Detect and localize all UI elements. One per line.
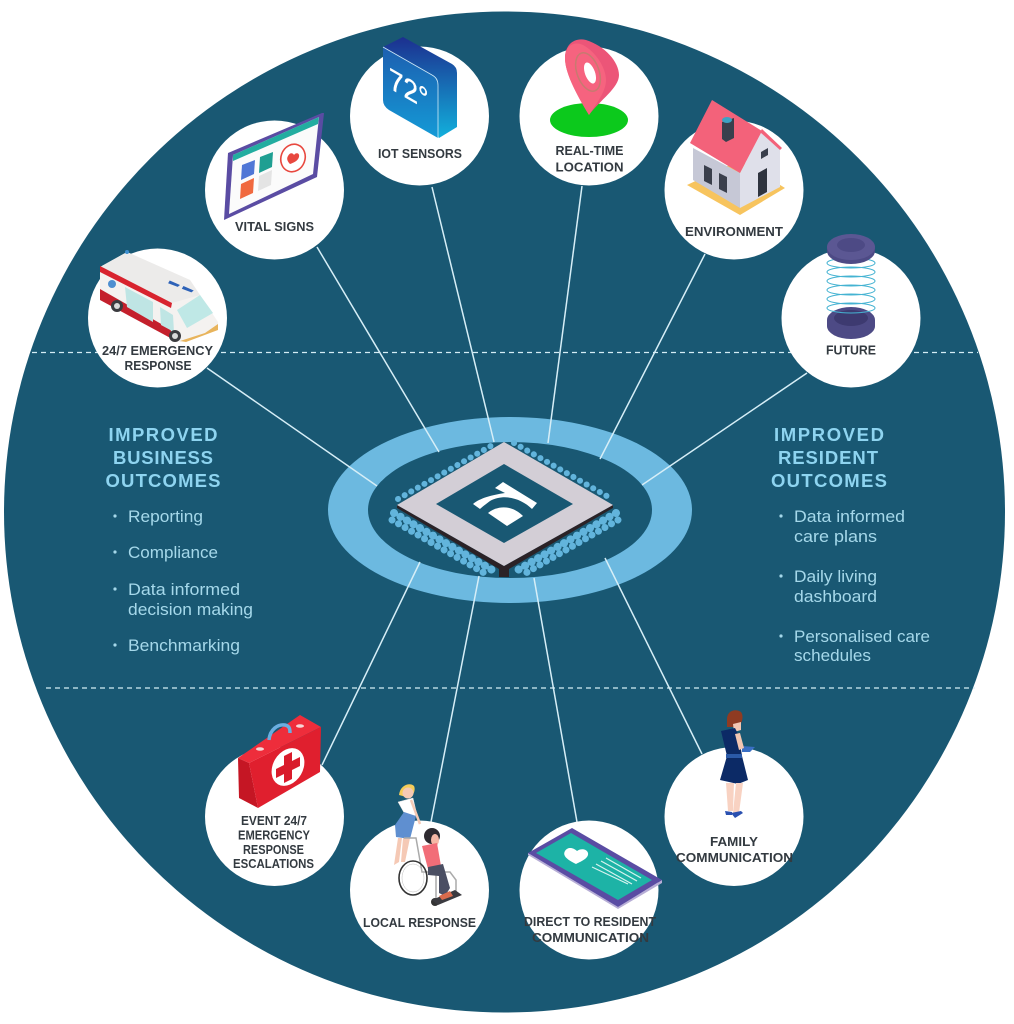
icon: ambulance: [100, 250, 218, 342]
heading: resident outcomes: OUTCOMES: [771, 470, 887, 491]
node: future: [782, 234, 920, 388]
heading: business outcomes: IMPROVED: [108, 424, 218, 445]
list: resident outcomes: Personalised care: [794, 628, 930, 646]
list: resident outcomes: care plans: [794, 528, 877, 546]
list: resident outcomes: Data informed: [794, 508, 905, 526]
icon: woman with tablet: [720, 710, 755, 818]
label: [233, 814, 314, 871]
node: family communication: [664, 710, 804, 886]
list: business outcomes: Benchmarking: [128, 637, 240, 655]
icon: thermostat tile: [383, 37, 457, 138]
heading: business outcomes: BUSINESS: [113, 447, 213, 468]
label: [102, 344, 214, 373]
connector lines: [207, 186, 807, 822]
node: event escalations: [205, 715, 344, 886]
icon: wheelchair and carer: [394, 784, 462, 906]
list: resident outcomes: Daily living: [794, 568, 877, 586]
label: FAMILY: [710, 835, 759, 849]
node: environment: [664, 100, 804, 260]
heading: resident outcomes: [771, 424, 887, 491]
node: direct to resident: [520, 820, 662, 960]
node: iot sensors: [350, 37, 489, 186]
label: COMMUNICATION: [676, 851, 793, 865]
list: business outcomes: decision making: [128, 601, 253, 619]
label: LOCATION: [556, 160, 624, 174]
heading: resident outcomes: IMPROVED: [774, 424, 884, 445]
logo: [473, 482, 537, 526]
label: EVENT 24/7: [241, 814, 307, 828]
list: resident outcomes: dashboard: [794, 588, 877, 606]
central chip: [392, 442, 618, 577]
icon: smartphone: [528, 828, 662, 909]
heading: business outcomes: OUTCOMES: [106, 470, 220, 491]
label: LOCAL RESPONSE: [363, 916, 476, 930]
label: 24/7 EMERGENCY: [102, 344, 214, 358]
label: REAL-TIME: [556, 144, 624, 158]
label: RESPONSE: [124, 359, 192, 373]
label: VITAL SIGNS: [235, 220, 314, 234]
label: ESCALATIONS: [233, 857, 314, 871]
label: [524, 915, 656, 945]
label: IOT SENSORS: [378, 147, 462, 161]
list: business outcomes: [113, 508, 253, 655]
icon: spring: [827, 234, 875, 339]
label: RESPONSE: [243, 843, 304, 857]
icon: location pin: [550, 39, 628, 137]
list: business outcomes: Data informed: [128, 581, 240, 599]
list: business outcomes: Reporting: [128, 508, 203, 526]
node: real-time location: [520, 39, 658, 186]
list: business outcomes: Compliance: [128, 544, 218, 562]
heading: resident outcomes: RESIDENT: [778, 447, 879, 468]
label: EMERGENCY: [238, 828, 311, 842]
label: ENVIRONMENT: [685, 225, 783, 239]
icon: tablet: [224, 113, 324, 220]
list: resident outcomes: [779, 508, 930, 665]
central ring: [328, 417, 692, 603]
label: DIRECT TO RESIDENT: [524, 915, 656, 929]
list: resident outcomes: schedules: [794, 647, 871, 665]
label: [556, 144, 624, 174]
node: local response: [350, 784, 489, 960]
label: COMMUNICATION: [532, 931, 649, 945]
heading: business outcomes: [106, 424, 220, 491]
node: 24/7 emergency response: [88, 248, 227, 388]
icon: house: [687, 100, 785, 215]
label: FUTURE: [826, 344, 876, 358]
icon: first aid kit: [238, 715, 321, 808]
label: [676, 835, 793, 865]
icon: thermostat tile: 72°: [389, 62, 428, 118]
node: vital signs: [205, 113, 344, 260]
